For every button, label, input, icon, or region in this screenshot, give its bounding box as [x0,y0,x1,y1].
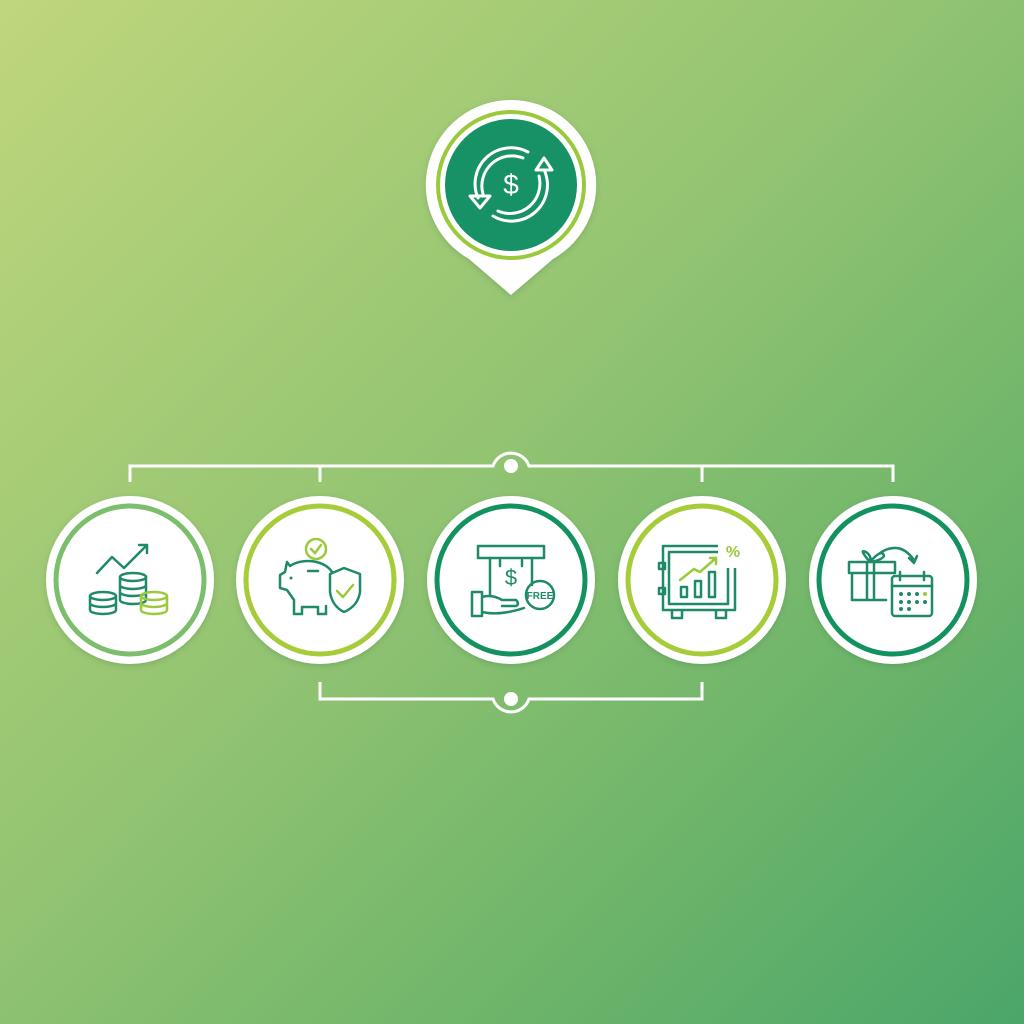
circle 3: ATM free cash: FREE [527,591,554,602]
connector lines [130,453,893,712]
top pin: money cycle [426,100,596,295]
circle 4: safe with growth: % [726,544,740,561]
circle 3: ATM free cash [427,496,595,664]
circle 5: gift to calendar [809,496,977,664]
circle 1: growth coins [46,496,214,664]
icon: dollar cycle arrows: $ [503,169,519,200]
circle 3: ATM free cash: $ [505,565,517,590]
circle 2: piggy bank shield [236,496,404,664]
circle 4: safe with growth [618,496,786,664]
icon: dollar cycle arrows [470,148,552,221]
